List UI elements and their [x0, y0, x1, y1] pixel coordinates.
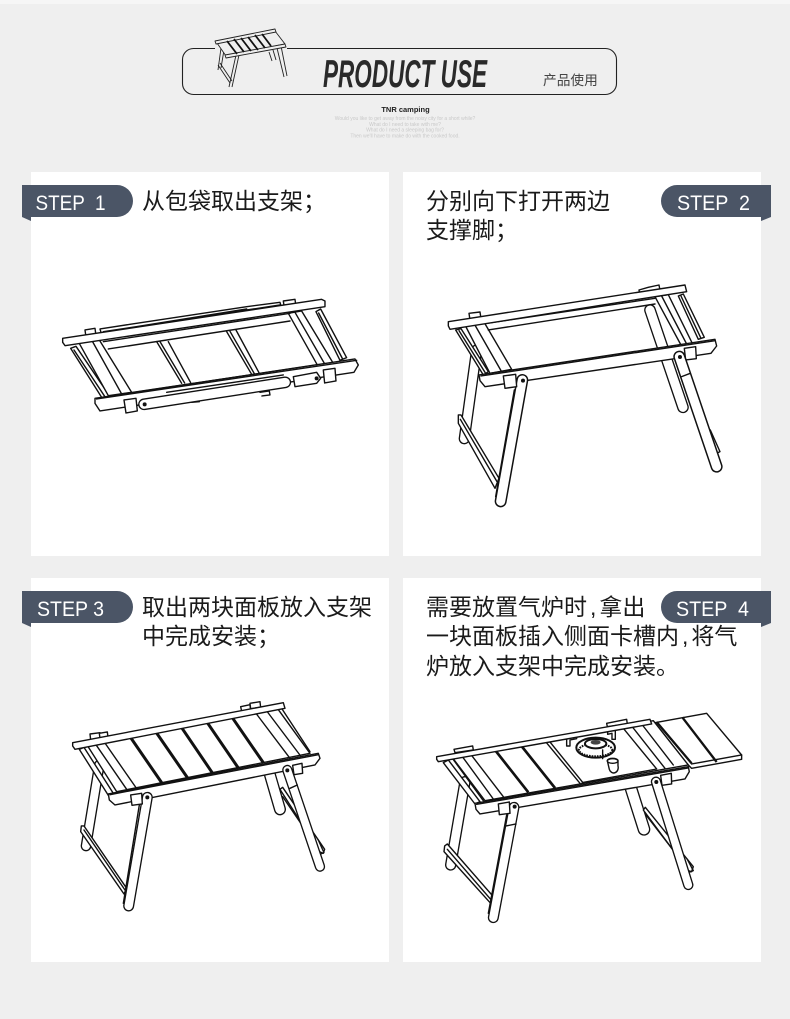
panel: step 4 [403, 578, 771, 962]
panel background [403, 578, 761, 962]
badge: STEP 3 [22, 591, 133, 627]
instruction text: 支撑脚； [426, 217, 518, 243]
icon: assembled table [215, 29, 287, 87]
instruction text: 取出两块面板放入支架 [142, 594, 372, 620]
title: PRODUCT USE: PRODUCT USE [323, 53, 488, 96]
brand tagline: Then we'll have to make do with the cooked food. [350, 134, 460, 140]
icon: gas canister knob [607, 758, 618, 773]
badge: STEP 4: STEP 4 [676, 598, 749, 621]
illustration: folded frame [63, 299, 358, 413]
instruction text: 从包袋取出支架； [142, 188, 326, 214]
illustration: frame with legs open [448, 285, 720, 501]
instruction text: 一块面板插入侧面卡槽内,将气 [426, 623, 737, 649]
badge: STEP 1 [22, 185, 133, 221]
banner outline [182, 48, 616, 94]
panel: step 1 [22, 172, 389, 556]
instruction text: 中完成安装； [142, 623, 280, 649]
brand tagline [335, 116, 475, 140]
panel background [403, 172, 761, 556]
badge: STEP 2 [661, 185, 771, 221]
panel: step 3 [22, 578, 389, 962]
instruction text [142, 594, 372, 649]
panel background [31, 578, 389, 962]
brand note [335, 105, 475, 140]
badge: STEP 4 [661, 591, 771, 627]
illustration: table with panels [73, 702, 325, 906]
instruction text: 分别向下打开两边 [426, 188, 610, 214]
icon: gas stove burner [567, 729, 615, 759]
panel background [31, 172, 389, 556]
subtitle: 产品使用: 产品使用 [543, 72, 598, 88]
brand name: TNR camping [381, 105, 430, 114]
brand tagline: Would you like to get away from the noisy city for a short while? [335, 116, 475, 122]
badge: STEP 1: STEP 1 [36, 192, 106, 215]
instruction text [426, 188, 610, 243]
instruction text: 需要放置气炉时,拿出 [426, 594, 645, 620]
header banner [182, 29, 616, 96]
extension shelf [655, 713, 742, 768]
brand tagline: What do I need a sleeping bag for? [366, 128, 444, 134]
badge: STEP 3: STEP 3 [37, 598, 104, 621]
brand tagline: What do I need to take with me? [369, 122, 441, 128]
illustration: table with stove and side shelf [437, 713, 742, 918]
badge: STEP 2: STEP 2 [677, 192, 750, 215]
panel: step 2 [403, 172, 771, 556]
instruction text: 炉放入支架中完成安装。 [426, 653, 679, 679]
instruction text [426, 594, 737, 679]
